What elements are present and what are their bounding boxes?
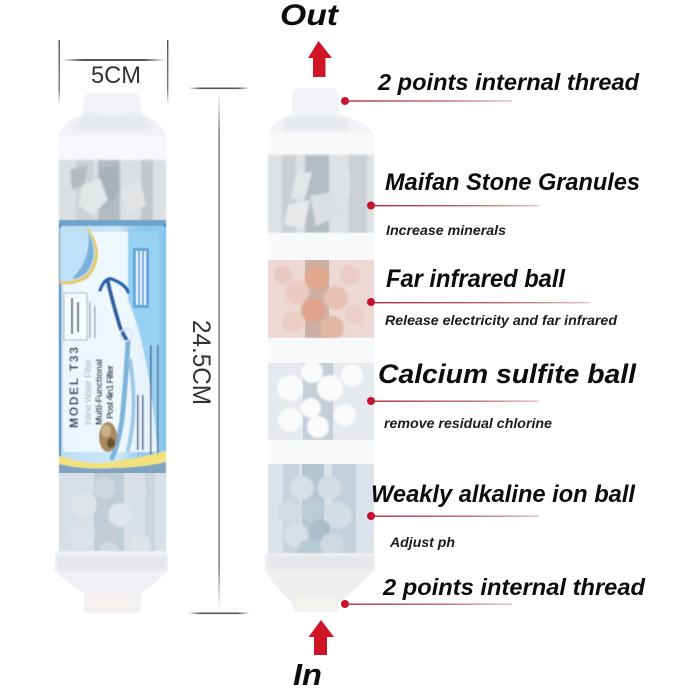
- bottom end cap: [55, 551, 168, 613]
- width dimension: 5CM: [58, 40, 168, 105]
- label subtitle text: Multi-Functional: [94, 359, 104, 425]
- callout: Calcium sulfite ball: Calcium sulfite ball: [378, 359, 637, 389]
- callout: bottom thread: 2 points internal thread: [382, 574, 646, 600]
- callout: Weakly alkaline ion ball: Adjust ph: [389, 534, 455, 550]
- callout: Calcium sulfite ball: [367, 359, 637, 431]
- callout: Maifan Stone Granules: [367, 169, 640, 238]
- white band 2: [268, 233, 374, 260]
- callout: bottom thread: [341, 574, 646, 608]
- weakly alkaline balls layer: [268, 464, 374, 560]
- white band 1: [268, 133, 374, 155]
- label subtitle text: [83, 359, 115, 425]
- callout: Far infrared ball: Far infrared ball: [386, 265, 566, 293]
- stone granules layer: [268, 155, 374, 233]
- cartridge shell: [55, 93, 168, 613]
- callout: top thread: [341, 69, 640, 105]
- callout: Maifan Stone Granules: Increase minerals: [386, 222, 506, 238]
- callout: top thread: 2 points internal thread: [377, 69, 640, 95]
- shell: [265, 88, 375, 612]
- label mineral stone picture: [99, 422, 117, 452]
- label blue water splash: [100, 279, 134, 458]
- callout: Weakly alkaline ion ball: Weakly alkaline ion ball: [371, 481, 636, 508]
- white band 4: [268, 440, 374, 464]
- arrow: in, pointing up: [308, 620, 334, 655]
- right filter cartridge cross-section: [265, 88, 375, 612]
- left filter cartridge with label: [55, 93, 168, 613]
- stone granules section: [59, 160, 166, 221]
- callout: Far infrared ball: [367, 265, 617, 328]
- top cap detail: [285, 117, 347, 131]
- far infrared balls layer: [268, 260, 374, 340]
- heading: In: In: [293, 657, 322, 692]
- callout: Far infrared ball: Release electricity and far infrared: [385, 312, 617, 328]
- top cap highlight: [69, 112, 156, 130]
- width dimension: 5CM: 5CM: [91, 62, 141, 89]
- label title text: MODEL T33: [67, 347, 81, 428]
- callout: Calcium sulfite ball: remove residual chlorine: [384, 415, 552, 431]
- label subtitle text: Post 4in1 Filter: [105, 365, 115, 419]
- white band 3: [268, 338, 374, 363]
- label light-blue strip with small print: [128, 227, 166, 460]
- ion balls section: [59, 473, 166, 564]
- label: [59, 220, 166, 475]
- white band top: [59, 137, 166, 160]
- label white panel: [63, 232, 159, 452]
- label spec box: [64, 293, 96, 340]
- bottom end cap: [265, 553, 375, 612]
- label blue disc with yellow arc: [60, 228, 98, 284]
- callout: Weakly alkaline ion ball: [367, 481, 636, 550]
- label subtitle text: Inline Water Filter: [83, 359, 93, 425]
- callout: Maifan Stone Granules: Maifan Stone Granules: [385, 169, 640, 196]
- arrow: out, pointing up: [308, 41, 332, 77]
- label yellow wave: [59, 451, 166, 468]
- calcium sulfite balls layer: [268, 361, 374, 440]
- height dimension: 24.5CM: 24.5CM: [187, 320, 215, 405]
